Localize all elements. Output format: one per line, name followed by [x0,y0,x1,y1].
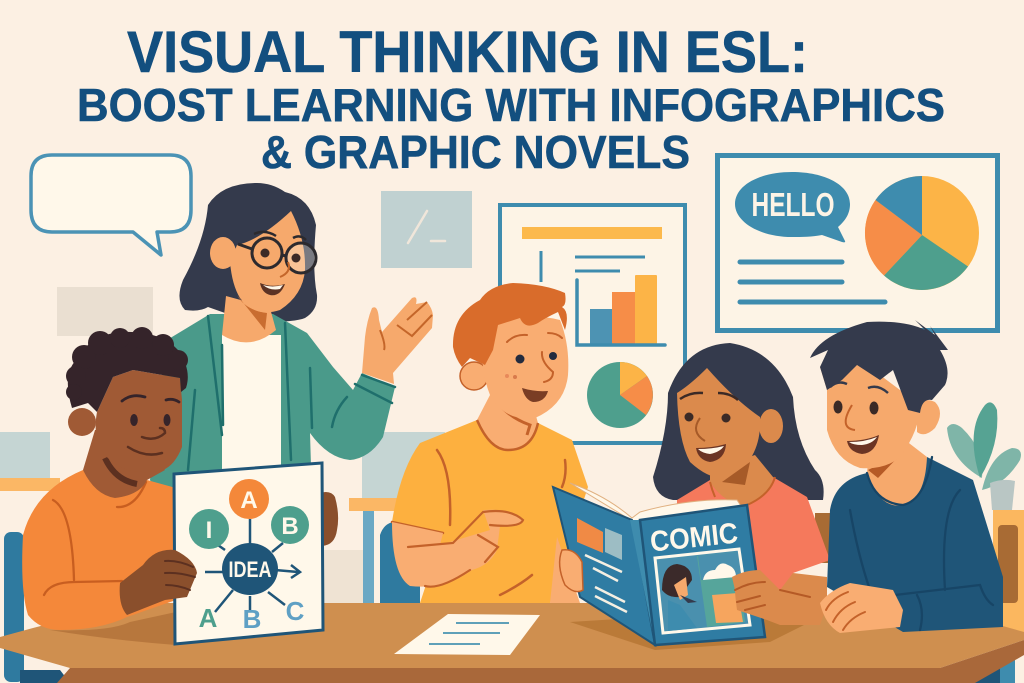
right boy's hand on table [820,583,903,633]
wall note square [381,191,472,268]
mind map poster: A [240,487,258,514]
wall poster: bar and pie charts [500,205,685,443]
desk [0,603,1024,683]
title: VISUAL THINKING IN ESL: [127,20,808,85]
mind map poster: B [281,513,299,540]
plant [947,402,1021,510]
girl [653,343,830,603]
empty speech bubble [31,155,191,255]
title: BOOST LEARNING WITH INFOGRAPHICS [77,79,945,131]
wall poster: hello and pie chart [718,156,998,330]
fingers behind the poster [314,492,338,548]
boy on the left [22,327,188,630]
chair behind redhead student [380,522,420,603]
title: & GRAPHIC NOVELS [261,126,690,178]
left boy's hand on poster [120,550,197,615]
mind map poster: A [199,603,218,633]
mind map poster: B [243,604,261,634]
hand holding the comic [560,550,583,592]
paper on table [394,614,540,655]
mind map poster: IDEA [228,557,272,582]
mind map poster [174,463,323,644]
title [77,20,945,178]
redhead student [392,283,588,603]
comic book [553,483,765,645]
wall poster: hello and pie chart: HELLO [752,186,834,223]
teacher [150,183,433,500]
comic book: COMIC [649,518,740,559]
girl's forearm and hand [732,570,827,625]
boy on the right [810,320,1003,632]
mind map poster: I [206,517,212,544]
mind map poster: C [286,596,305,626]
